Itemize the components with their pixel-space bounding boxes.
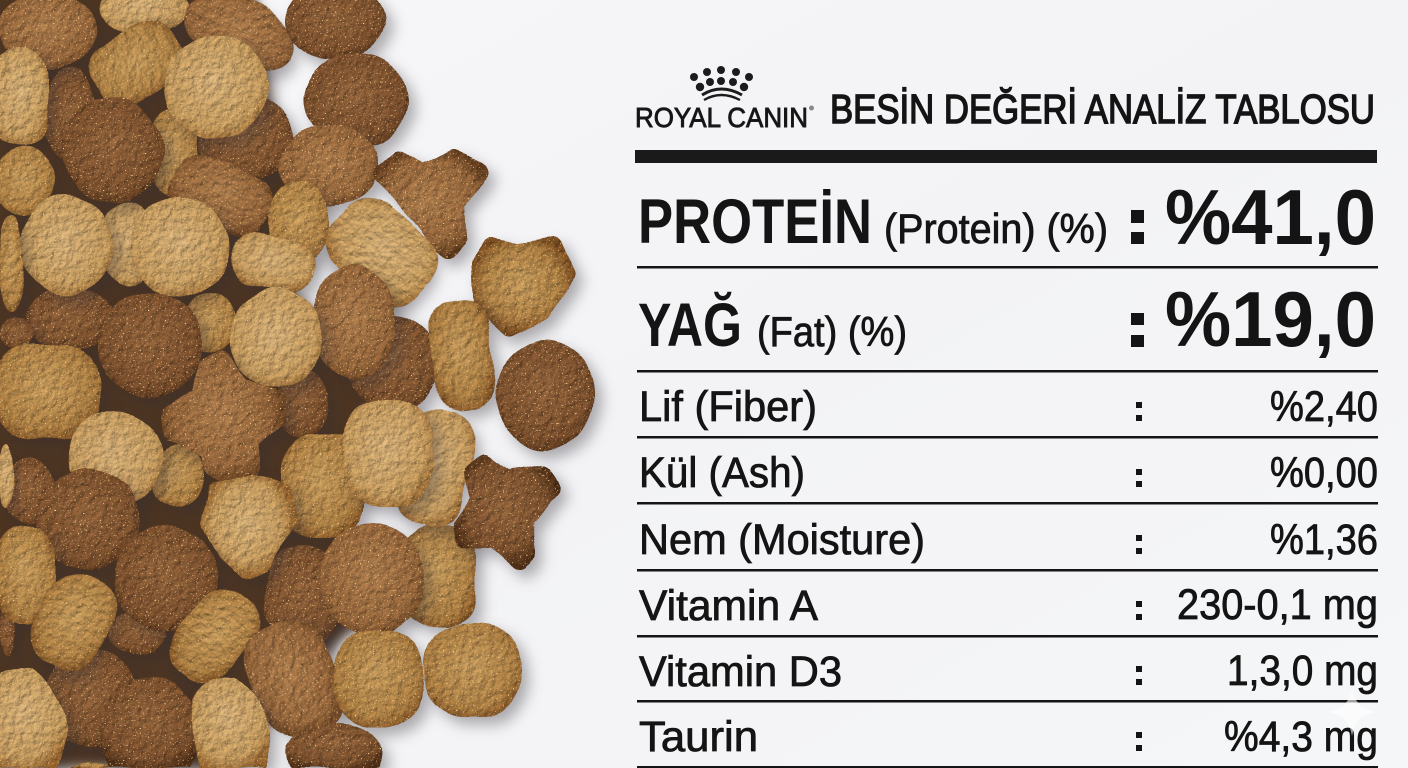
- row: vitamin A: 230-0,1 mg: [1177, 581, 1378, 629]
- kibble: cross right: [462, 464, 550, 560]
- kibble: T-shaped brown: [383, 158, 479, 250]
- wordmark: ROYAL CANIN: [635, 102, 808, 133]
- row: vitamin D3: Vitamin D3: [639, 648, 842, 696]
- icon: sparkle watermark: [1328, 688, 1376, 736]
- row: fat: %19,0: [1165, 275, 1376, 363]
- header rule: [635, 150, 1377, 163]
- row: protein: %41,0: [1165, 173, 1376, 261]
- row: fat: (Fat) (%): [757, 308, 907, 355]
- row: ash: %0,00: [1270, 449, 1378, 497]
- row: vitamin A: [639, 581, 1378, 630]
- kibble: cross dark: [170, 360, 276, 478]
- row: ash: [639, 449, 1378, 497]
- logo: Royal Canin: [635, 66, 814, 133]
- row: taurine: Taurin: [639, 713, 758, 761]
- row: taurine: %4,3 mg: [1224, 713, 1378, 761]
- registered mark: [809, 106, 814, 110]
- kibble pile photo: [0, 0, 594, 768]
- icon: crown: [690, 66, 753, 100]
- row: taurine: [639, 713, 1378, 761]
- row: vitamin A: Vitamin A: [639, 582, 818, 630]
- row: protein: PROTEİN: [638, 187, 872, 257]
- row: fat: YAĞ: [638, 291, 742, 359]
- row: ash: Kül (Ash): [639, 449, 805, 497]
- kibble: heart tan: [480, 247, 566, 328]
- row: fiber: %2,40: [1270, 383, 1378, 431]
- kibble: heart light: [210, 484, 288, 570]
- row: moisture: %1,36: [1270, 516, 1378, 564]
- row: protein: [638, 173, 1376, 261]
- row: fiber: [639, 383, 1378, 431]
- table: nutrition analysis: [637, 173, 1378, 768]
- row: vitamin D3: [639, 647, 1378, 696]
- row: fiber: Lif (Fiber): [639, 383, 817, 431]
- row: vitamin D3: 1,3,0 mg: [1227, 647, 1378, 695]
- row: fat: [638, 275, 1376, 363]
- row: moisture: Nem (Moisture): [639, 516, 925, 564]
- row: moisture: [639, 516, 1378, 564]
- row: protein: (Protein) (%): [884, 205, 1108, 252]
